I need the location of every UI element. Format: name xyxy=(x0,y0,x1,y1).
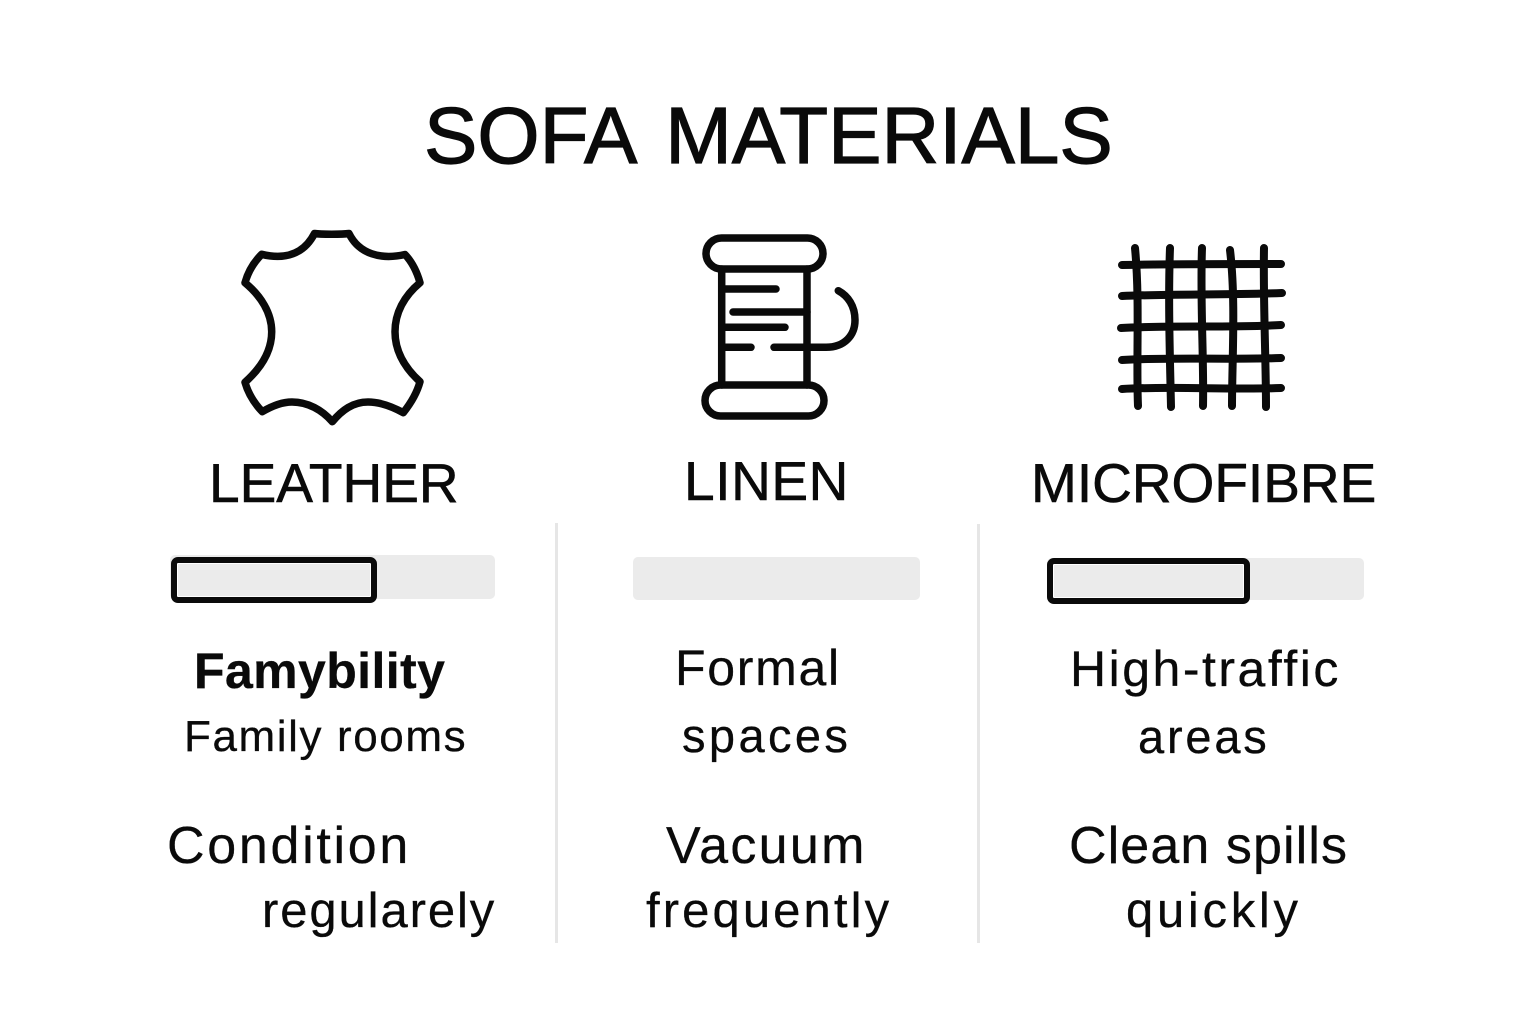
divider: left xyxy=(555,523,558,943)
text: microfibre care: quickly xyxy=(1126,884,1302,938)
icon: microfibre grid xyxy=(1117,244,1286,411)
heading: microfibre: MICROFIBRE xyxy=(1031,452,1376,514)
text: leather use xyxy=(184,643,467,761)
text: linen use: spaces xyxy=(682,709,851,762)
bar: microfibre xyxy=(1047,558,1364,604)
text: leather use: Family rooms xyxy=(184,712,467,761)
text: microfibre use: areas xyxy=(1138,710,1270,763)
text: microfibre use: High-traffic xyxy=(1070,641,1341,697)
text: linen use: Formal xyxy=(675,640,841,696)
icon: linen thread spool xyxy=(701,234,859,420)
text: linen care: Vacuum xyxy=(666,817,867,875)
title: SOFA MATERIALS xyxy=(424,91,1113,180)
text: microfibre care: Clean spills xyxy=(1069,817,1348,875)
text: linen care xyxy=(646,817,892,938)
text: leather care: Condition xyxy=(167,817,411,875)
heading: linen: LINEN xyxy=(684,450,849,512)
text: leather care: regularely xyxy=(262,884,496,938)
heading: leather: LEATHER xyxy=(209,452,459,514)
text: leather care xyxy=(167,817,496,938)
text: leather use: Famybility xyxy=(194,643,445,699)
text: microfibre use xyxy=(1070,641,1341,763)
text: microfibre care xyxy=(1069,817,1348,938)
divider: right xyxy=(977,524,980,943)
text: linen use xyxy=(675,640,851,762)
text: linen care: frequently xyxy=(646,884,892,938)
bar: linen xyxy=(633,557,920,600)
bar: leather xyxy=(170,555,495,603)
icon: leather hide xyxy=(241,230,424,426)
